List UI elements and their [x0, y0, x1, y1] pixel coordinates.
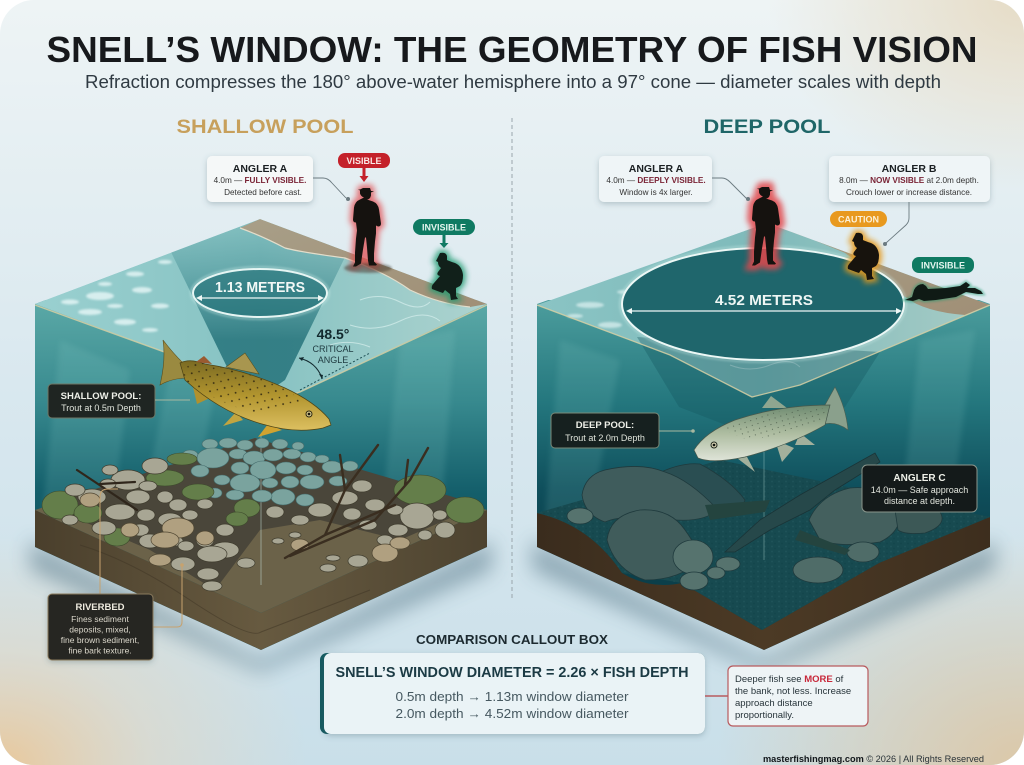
label: angler C: distance at depth. [884, 496, 955, 506]
sunken log [725, 453, 880, 552]
critical angle: CRITICAL [312, 344, 354, 354]
title: SNELL’S WINDOW: THE GEOMETRY OF FISH VISION [46, 29, 978, 70]
shaft of light [763, 440, 765, 560]
fish: brown trout [160, 340, 331, 437]
block shadow [30, 540, 492, 672]
label: angler B [829, 156, 990, 246]
surface sparkles [61, 260, 172, 332]
critical angle: ANGLE [318, 355, 348, 365]
label: angler A deep: 4.0m — DEEPLY VISIBLE. [606, 176, 706, 185]
label: angler C [862, 465, 977, 512]
water wall [537, 300, 990, 660]
heading: deep pool: DEEP POOL [704, 117, 831, 138]
bank [240, 219, 487, 307]
surface sparkles [567, 290, 633, 328]
panel: deep pool block [320, 156, 995, 764]
comparison callout box [320, 653, 705, 734]
label: shallow pool trout: Trout at 0.5m Depth [61, 403, 141, 413]
label: deep pool trout [551, 413, 695, 448]
stones: moss [42, 453, 484, 546]
label: angler A shallow [207, 156, 350, 202]
bank [786, 230, 990, 315]
stones: grey [62, 458, 455, 591]
label: riverbed [48, 489, 184, 660]
surface edge [537, 305, 990, 397]
water wall [35, 300, 487, 660]
fish: silver trout [694, 387, 848, 472]
comparison heading: COMPARISON CALLOUT BOX [416, 633, 609, 647]
riverbed floor [537, 460, 990, 630]
label: angler B: ANGLER B [882, 163, 937, 175]
label: riverbed: fine brown sediment, [61, 635, 139, 645]
label: deep pool trout: Trout at 2.0m Depth [565, 433, 645, 443]
prone angler C (deep) [905, 282, 983, 301]
window ellipse: 1.13 meters [191, 267, 329, 319]
crouching angler (shallow) [432, 253, 463, 300]
label: shallow pool trout [48, 384, 190, 418]
heading: shallow pool: SHALLOW POOL [176, 117, 354, 138]
note callout [705, 666, 868, 726]
note callout: Deeper fish see MORE of [735, 674, 844, 685]
label: angler B: Crouch lower or increase distance. [846, 188, 972, 197]
riverbed soil [35, 510, 487, 650]
branch: right [285, 445, 428, 558]
critical angle [299, 326, 354, 379]
chip: invisible deep [912, 257, 974, 273]
note callout: proportionally. [735, 710, 794, 721]
label: angler A shallow: 4.0m — FULLY VISIBLE. [214, 176, 306, 185]
label: riverbed: fine bark texture. [68, 646, 132, 656]
label: riverbed: deposits, mixed, [69, 624, 131, 634]
stones: submerged upper group [182, 438, 358, 506]
label: angler A shallow: Detected before cast. [224, 188, 302, 197]
label: deep pool trout: DEEP POOL: [576, 420, 634, 431]
chip: invisible: INVISIBLE [422, 222, 466, 232]
note callout: the bank, not less. Increase [735, 686, 851, 697]
panel: shallow pool block [30, 153, 995, 764]
surface edge [35, 305, 487, 405]
chip: caution [830, 211, 887, 227]
window ellipse: 1.13 meters: 1.13 METERS [215, 280, 305, 296]
label: riverbed: Fines sediment [71, 614, 129, 624]
note callout: approach distance [735, 698, 813, 709]
sunken log root [705, 500, 850, 555]
standing angler A (deep) [752, 187, 780, 266]
critical angle: 48.5° [317, 326, 349, 342]
label: angler A deep: Window is 4x larger. [619, 188, 693, 197]
chip: visible [338, 153, 390, 182]
crouching angler B (deep) [848, 233, 879, 280]
label: shallow pool trout: SHALLOW POOL: [61, 391, 141, 402]
block shadow [532, 540, 995, 672]
window cone [637, 337, 880, 424]
stone bed [73, 438, 456, 583]
branch: left [77, 470, 137, 510]
window ellipse: 4.52 meters [620, 246, 906, 362]
shaft of light [260, 436, 262, 585]
label: riverbed: RIVERBED [75, 602, 125, 613]
critical angle dashed line [300, 353, 370, 390]
center divider [511, 118, 513, 600]
comparison callout box: 2.0m depth → 4.52m window diameter [396, 707, 628, 721]
stones: tan [80, 493, 410, 566]
riverbed soil [537, 513, 990, 650]
boulders [567, 464, 942, 590]
riverbed floor [35, 438, 487, 613]
comparison callout box: SNELL’S WINDOW DIAMETER = 2.26 × FISH DEPTH [336, 665, 688, 681]
water surface [537, 223, 990, 397]
label: angler A shallow: ANGLER A [233, 163, 288, 175]
label: angler C: ANGLER C [893, 473, 946, 484]
label: angler B: 8.0m — NOW VISIBLE at 2.0m depth. [839, 176, 979, 185]
label: angler A deep [599, 156, 750, 202]
window cone [172, 228, 344, 385]
water surface [35, 219, 487, 405]
subtitle: Refraction compresses the 180° above-water hemisphere into a 97° cone — diameter scales with depth [85, 72, 941, 92]
label: angler C: 14.0m — Safe approach [871, 485, 968, 495]
chip: invisible deep: INVISIBLE [921, 260, 965, 270]
chip: visible: VISIBLE [346, 156, 382, 166]
label: angler A deep: ANGLER A [629, 163, 684, 175]
chip: caution: CAUTION [838, 214, 879, 224]
chip: invisible [413, 219, 475, 248]
footer credit: masterfishingmag.com © 2026 | All Rights Reserved [763, 754, 984, 764]
comparison callout box: 0.5m depth → 1.13m window diameter [396, 690, 628, 704]
window ellipse: 4.52 meters: 4.52 METERS [715, 292, 813, 309]
standing angler A (shallow) [344, 188, 392, 273]
